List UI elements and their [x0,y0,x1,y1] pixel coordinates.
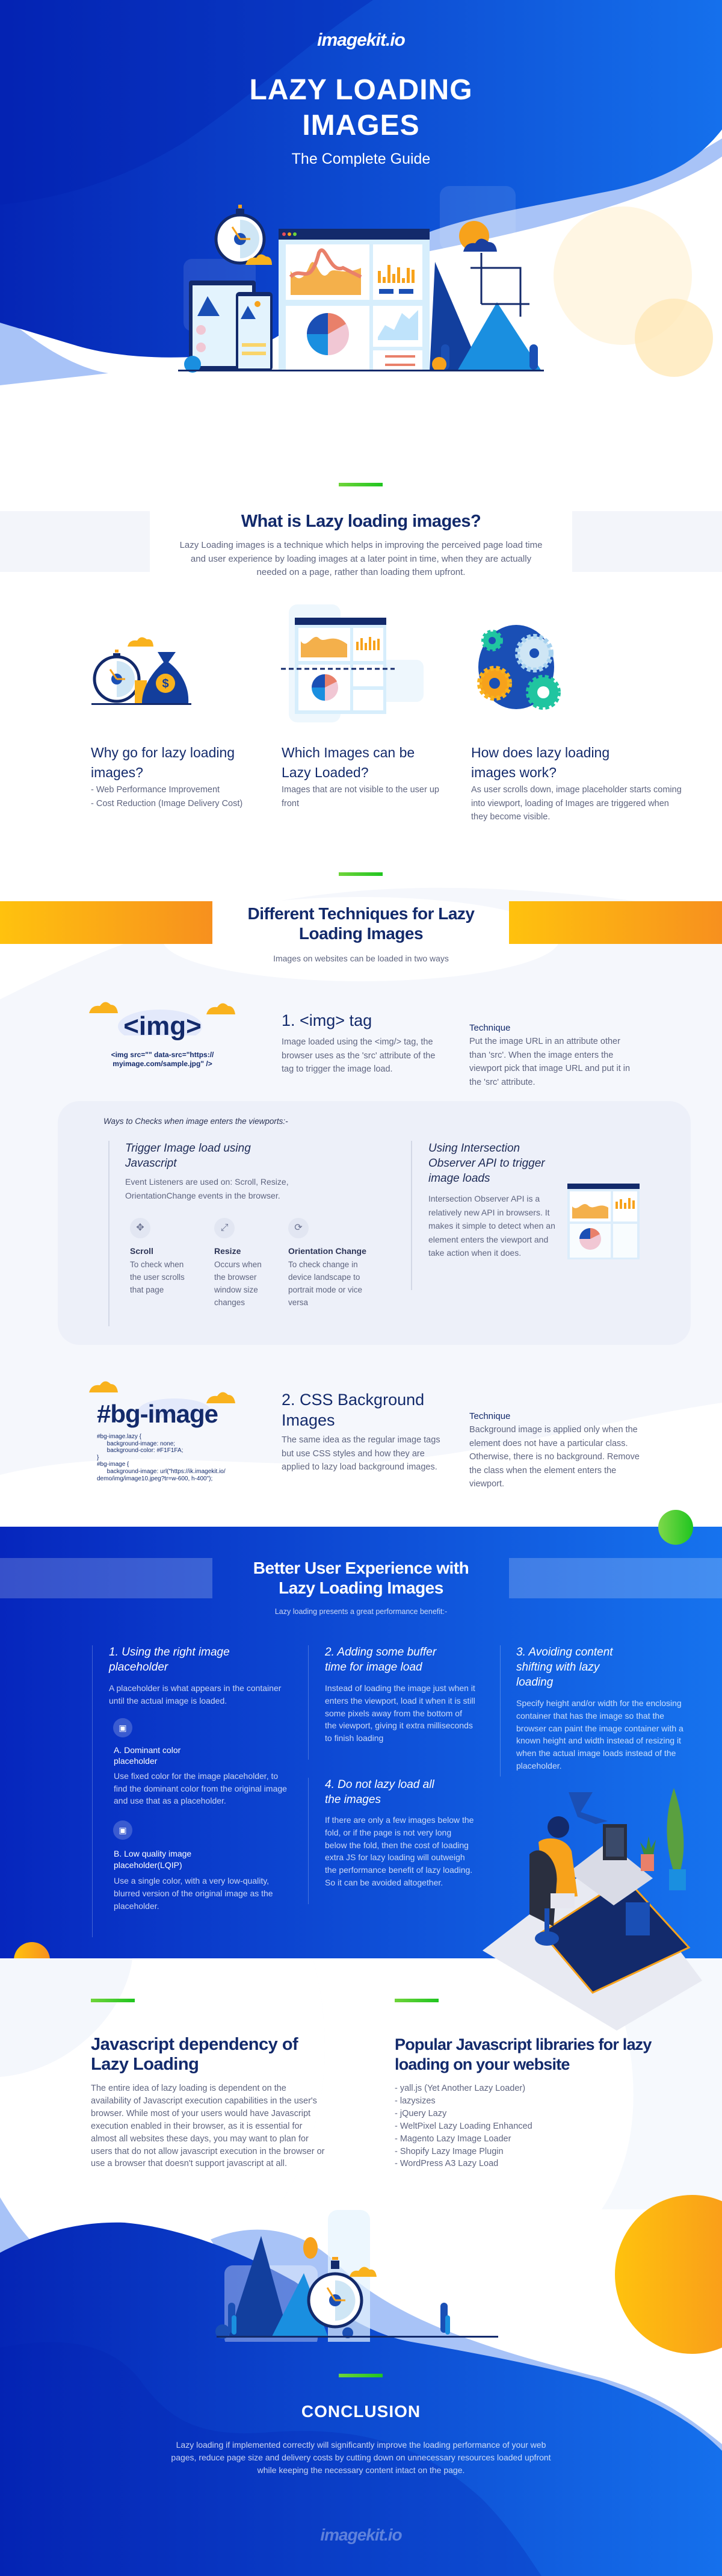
icon: bg-image: background-image: url("https://ik.imagekit.io/ [107,1468,226,1475]
orange ball [14,1942,50,1978]
column: why go for lazy loading: Why go for lazy loading images? [91,745,235,780]
icon: bg-image: #bg-image { [97,1461,129,1468]
tip 1: right placeholder: A. Dominant color [114,1745,180,1755]
tip 3: content shifting: shifting with lazy [516,1661,599,1674]
event: scroll: To check when the user scrolls that page [130,1260,185,1294]
technique 1 method: Technique [469,1023,510,1033]
conclusion background [0,2195,722,2576]
tip 4: do not lazy load all [325,1778,474,1887]
logo: imagekit.io [317,30,405,50]
intro paragraph: Lazy Loading images is a technique which helps in improving the perceived page load time and user experience by loading images at a later point in time, when they are actually needed on a page, rather than loading them upfront. [180,540,542,577]
column: why go for lazy loading: - Web Performance Improvement [91,785,220,795]
divider [91,1999,135,2002]
subpanel: intersection observer [428,1142,555,1258]
subtitle: The Complete Guide [292,151,430,167]
section: what is lazy loading [0,511,722,577]
column: how does it work [471,745,682,822]
illustration: developer at desk [483,1788,702,2031]
tip 2: buffer time [325,1646,475,1743]
tip 1: right placeholder: placeholder [109,1661,168,1674]
tip 1: right placeholder: Use fixed color for the image placeholder, to find the dominant color from the original image and use that as a placeholder. [114,1771,287,1805]
tip 1: right placeholder: A placeholder is what appears in the container until the actual image is loaded. [109,1683,281,1705]
icon: stopwatch and money bag: $ [162,677,169,691]
column: how does it work: As user scrolls down, image placeholder starts coming into viewport, loading of Images are triggered when they become visible. [471,785,682,822]
icon: mini dashboard [567,1184,640,1259]
event: orientation [288,1218,366,1307]
column: how does it work: How does lazy loading [471,745,609,760]
icon: dashboard with fold line [281,604,424,722]
column lines [92,1645,93,1937]
icon: img tag [89,1002,235,1068]
subtitle: techniques: Images on websites can be loaded in two ways [273,954,449,963]
side bands [0,511,150,572]
tip 1: right placeholder: 1. Using the right image [109,1646,230,1659]
event: resize: Occurs when the browser window size changes [214,1260,262,1307]
column: which images: Images that are not visible to the user up front [282,785,439,808]
blue bands [0,1558,212,1598]
panel: ways to check viewport [58,1101,691,1345]
tip 1: right placeholder: B. Low quality image [114,1849,191,1858]
divider [339,483,383,486]
heading: What is Lazy loading images? [241,512,481,531]
section: popular libraries: - lazysizes [395,2096,436,2106]
divider [395,1999,439,2002]
subpanel: intersection observer: Using Intersection Observer API to trigger image loads [428,1142,545,1185]
icon: img tag: <img> [123,1011,202,1041]
title: IMAGES [302,110,420,141]
subpanel: intersection observer: Intersection Observer API is a relatively new API in browsers. It makes it simple to detect when an element enters the viewport and take action when it does. [428,1194,555,1258]
icon: bg-image: #bg-image.lazy { [97,1433,141,1440]
tip 3: content shifting: loading [516,1676,553,1689]
subpanel: javascript trigger: Trigger Image load using [125,1142,251,1155]
green ball [658,1510,693,1545]
tip 4: do not lazy load all: 4. Do not lazy load all [325,1778,434,1791]
icon: image placeholder A: ▣ [119,1723,127,1733]
divider [339,2374,383,2377]
section: popular libraries: - Shopify Lazy Image Plugin [395,2147,504,2156]
event: orientation: To check change in device landscape to portrait mode or vice versa [288,1260,362,1307]
hero background [0,0,722,385]
heading: better UX [253,1559,469,1597]
light background circles lower [0,1958,722,2209]
subpanel: javascript trigger [125,1142,289,1200]
tip 1: right placeholder: placeholder [114,1756,157,1766]
icon: bg-image: background-color: #F1F1FA; [107,1447,183,1454]
heading: better UX: Better User Experience with [253,1559,469,1577]
section: javascript dependency: Javascript dependency of [91,2035,298,2054]
tip 2: buffer time: Instead of loading the image just when it enters the viewport, load it when it is still some pixels away from the bottom of the viewport, giving it extra milliseconds to finish loading [325,1683,475,1743]
event: scroll [130,1218,185,1294]
panel caption: Ways to Checks when image enters the viewports:- [103,1117,288,1126]
icon: image placeholder A [113,1718,132,1737]
heading: conclusion: CONCLUSION [301,2402,421,2421]
section: popular libraries: Popular Javascript libraries for lazy [395,2035,652,2053]
column: how does it work: images work? [471,765,557,780]
event: scroll: Scroll [130,1246,153,1256]
icon: gears [477,625,561,710]
tip 2: buffer time: time for image load [325,1661,422,1674]
icon: bg-image: demo/img/image10.jpeg?tr=w-600, h-400"); [97,1476,212,1482]
hero illustration: dashboard devices [178,186,544,373]
conclusion text: Lazy loading if implemented correctly will significantly improve the loading performance of your web pages, reduce page size and delivery costs by cutting down on unnecessary resources loaded upfront while keeping the necessary content intact on the page. [171,2440,551,2475]
event: orientation: Orientation Change [288,1246,366,1256]
section: popular libraries: - Magento Lazy Image Loader [395,2134,511,2144]
section: popular libraries: loading on your website [395,2055,570,2073]
tip 4: do not lazy load all: If there are only a few images below the fold, or if the page is not very long below the fold, then the cost of loading extra JS for lazy loading will outweigh the performance benefit of lazy loading. So it can be avoided altogether. [325,1815,474,1887]
event: scroll: ✥ [136,1223,144,1233]
technique 1 text: Image loaded using the <img/> tag, the browser uses as the 'src' attribute of the tag to trigger the image load. [282,1037,435,1074]
icon: bg-image: } [97,1454,99,1461]
tip 3: content shifting: Specify height and/or width for the enclosing container that has the image so that the browser can paint the image container with a known height and width instead of resizing it when the actual image loads instead of the placeholder. [516,1698,683,1771]
column: which images: Which Images can be Lazy Loaded? [282,745,415,780]
technique 2 method: Background image is applied only when the element does not have a particular class. Otherwise, there is no background. Remove the class when the element enters the viewport. [469,1425,640,1489]
column: why go for lazy loading [91,745,242,808]
subpanel: javascript trigger: Event Listeners are used on: Scroll, Resize, [125,1177,289,1187]
icon: bg-image: background-image: none; [107,1441,175,1447]
technique 2 text: 2. CSS Background Images [282,1391,424,1429]
technique 2 text [282,1391,440,1472]
subpanel: javascript trigger: Javascript [125,1157,177,1170]
tip 1: right placeholder [108,1646,287,1911]
divider [339,872,383,876]
section: popular libraries: - yall.js (Yet Another Lazy Loader) [395,2084,525,2093]
technique 1 method: Put the image URL in an attribute other than 'src'. When the image enters the viewport pick that image URL and put it in the 'src' attribute. [469,1037,630,1087]
blue section background [0,1527,722,1958]
event: orientation: ⟳ [294,1223,303,1233]
section: popular libraries [395,2035,652,2168]
tip 3: content shifting [516,1646,683,1771]
event: resize: Resize [214,1246,241,1256]
subpanel: javascript trigger: OrientationChange events in the browser. [125,1191,280,1200]
heading: techniques: Different Techniques for Lazy Loading Images [247,904,475,943]
technique 1 text [282,1011,435,1074]
footer logo: imagekit.io [320,2525,402,2544]
tip 3: content shifting: 3. Avoiding content [516,1646,613,1659]
section: javascript dependency: The entire idea of lazy loading is dependent on the availability of Javascript execution capabilities in the user's browser. While most of your users would have Javascript execution enabled in their browser, as it is essential for almost all websites these days, you may want to plan for users that do not allow javascript execution in the browser or use a browser that doesn't support javascript at all. [91,2084,324,2168]
section: javascript dependency: Lazy Loading [91,2055,199,2074]
section: popular libraries: - jQuery Lazy [395,2109,446,2118]
icon: image placeholder B: ▣ [119,1825,127,1835]
icon: image placeholder B [113,1820,132,1840]
icon: bg-image: #bg-image [97,1400,218,1428]
technique 2 text: The same idea as the regular image tags but use CSS styles and how they are applied to lazy load background images. [282,1435,440,1472]
event: resize [214,1218,262,1307]
icon: img tag: myimage.com/sample.jpg" /> [113,1060,212,1068]
section: popular libraries: - WordPress A3 Lazy Load [395,2159,498,2168]
tip 1: right placeholder: Use a single color, with a very low-quality, blurred version of the original image as the placeholder. [114,1876,273,1911]
title [249,74,473,141]
icon: bg-image [89,1381,235,1482]
orange bands [0,901,212,944]
title: LAZY LOADING [249,74,473,106]
icon: stopwatch and money bag [91,637,191,705]
subtitle: better UX: Lazy loading presents a great performance benefit:- [275,1607,447,1616]
tip 1: right placeholder: placeholder(LQIP) [114,1860,182,1870]
section: popular libraries: - WeltPixel Lazy Loading Enhanced [395,2121,532,2131]
column: which images [282,745,439,808]
column: why go for lazy loading: - Cost Reduction (Image Delivery Cost) [91,798,242,808]
techniques background [0,888,722,1475]
icon: img tag: <img src="" data-src="https:// [111,1051,214,1059]
tip 2: buffer time: 2. Adding some buffer [325,1646,436,1659]
conclusion illustration [215,2210,498,2342]
technique 2 method: Technique [469,1411,510,1421]
tip 4: do not lazy load all: the images [325,1793,381,1806]
event: resize: ⤢ [221,1223,228,1233]
heading: better UX: Lazy Loading Images [279,1578,443,1597]
section: javascript dependency [91,2035,325,2168]
technique 1 text: 1. <img> tag [282,1011,372,1029]
